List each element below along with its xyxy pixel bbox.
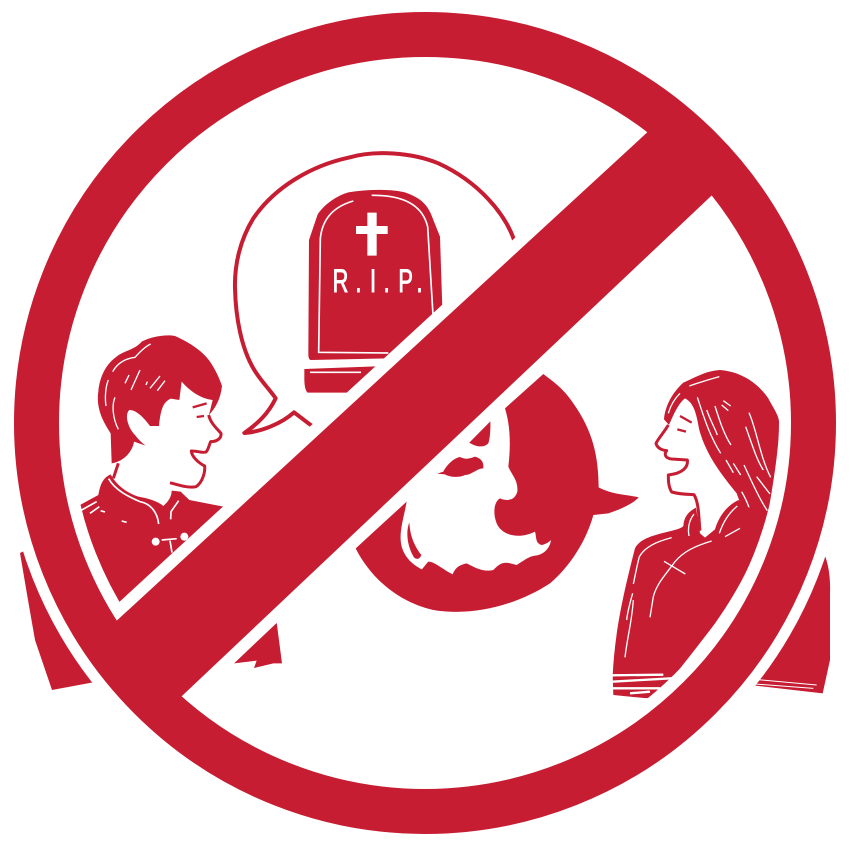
man jacket buttons xyxy=(152,538,160,546)
woman face outline xyxy=(656,425,700,531)
ghost sliver xyxy=(407,522,421,559)
bubble outline xyxy=(235,153,514,433)
woman jacket sleeve outside ring xyxy=(753,553,830,693)
woman hair xyxy=(664,370,779,530)
man jacket xyxy=(80,474,223,604)
man speaking xyxy=(80,335,282,668)
woman jacket bottom scraps xyxy=(613,675,675,700)
woman hair highlights xyxy=(668,377,771,528)
cross icon xyxy=(356,213,388,256)
speech bubble: ghost topic xyxy=(356,374,639,612)
speech bubble: death topic xyxy=(235,153,514,433)
ghost eye xyxy=(469,421,490,446)
woman jacket xyxy=(613,500,768,675)
tombstone body xyxy=(308,190,442,360)
man hair highlights xyxy=(105,344,165,429)
tombstone inner line xyxy=(319,195,433,353)
woman eye and eyebrow xyxy=(677,416,692,432)
ghost mouth xyxy=(437,457,483,477)
man eye and eyebrow xyxy=(193,403,207,417)
woman jacket details xyxy=(625,506,740,657)
tombstone xyxy=(304,190,442,393)
man jacket details xyxy=(82,479,179,553)
bubble with ghost cut-out xyxy=(356,374,639,612)
man hair xyxy=(98,335,222,463)
woman speaking xyxy=(612,370,830,700)
tombstone base xyxy=(304,366,376,393)
left jacket fragment outside ring xyxy=(20,550,95,690)
tombstone inscription: R.I.P. xyxy=(333,263,423,299)
man face outline xyxy=(113,415,221,487)
prohibition diagonal bar xyxy=(99,116,727,712)
white bar halo xyxy=(99,116,727,712)
man jacket lower fragment xyxy=(234,622,282,668)
